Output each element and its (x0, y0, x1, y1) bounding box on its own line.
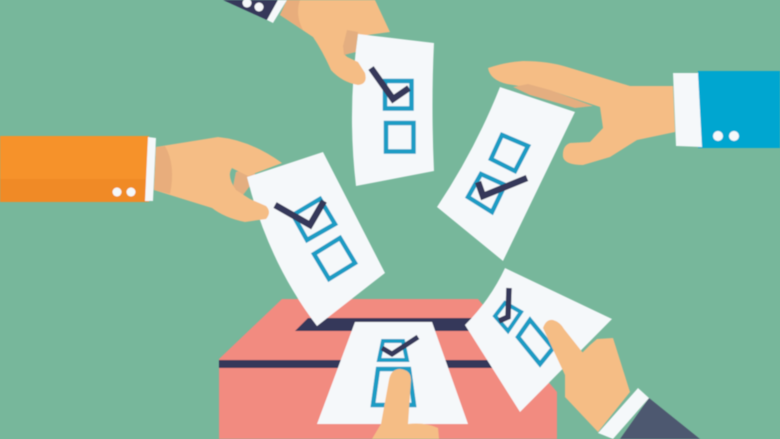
thumb: lower right hand (543, 320, 600, 397)
left hand fingers (228, 165, 256, 197)
ballot: top centre (352, 34, 434, 186)
thumb: top hand (330, 55, 366, 85)
front hand (372, 369, 439, 439)
left hand (0, 136, 282, 222)
right hand (488, 61, 780, 165)
lower right hand (565, 338, 700, 439)
ballot: left (247, 152, 385, 326)
top hand (223, 0, 390, 85)
ballot: right (437, 87, 575, 261)
ballot box (219, 299, 557, 439)
ballot: lower right (465, 268, 612, 412)
ballot: front, entering slot (317, 322, 468, 424)
